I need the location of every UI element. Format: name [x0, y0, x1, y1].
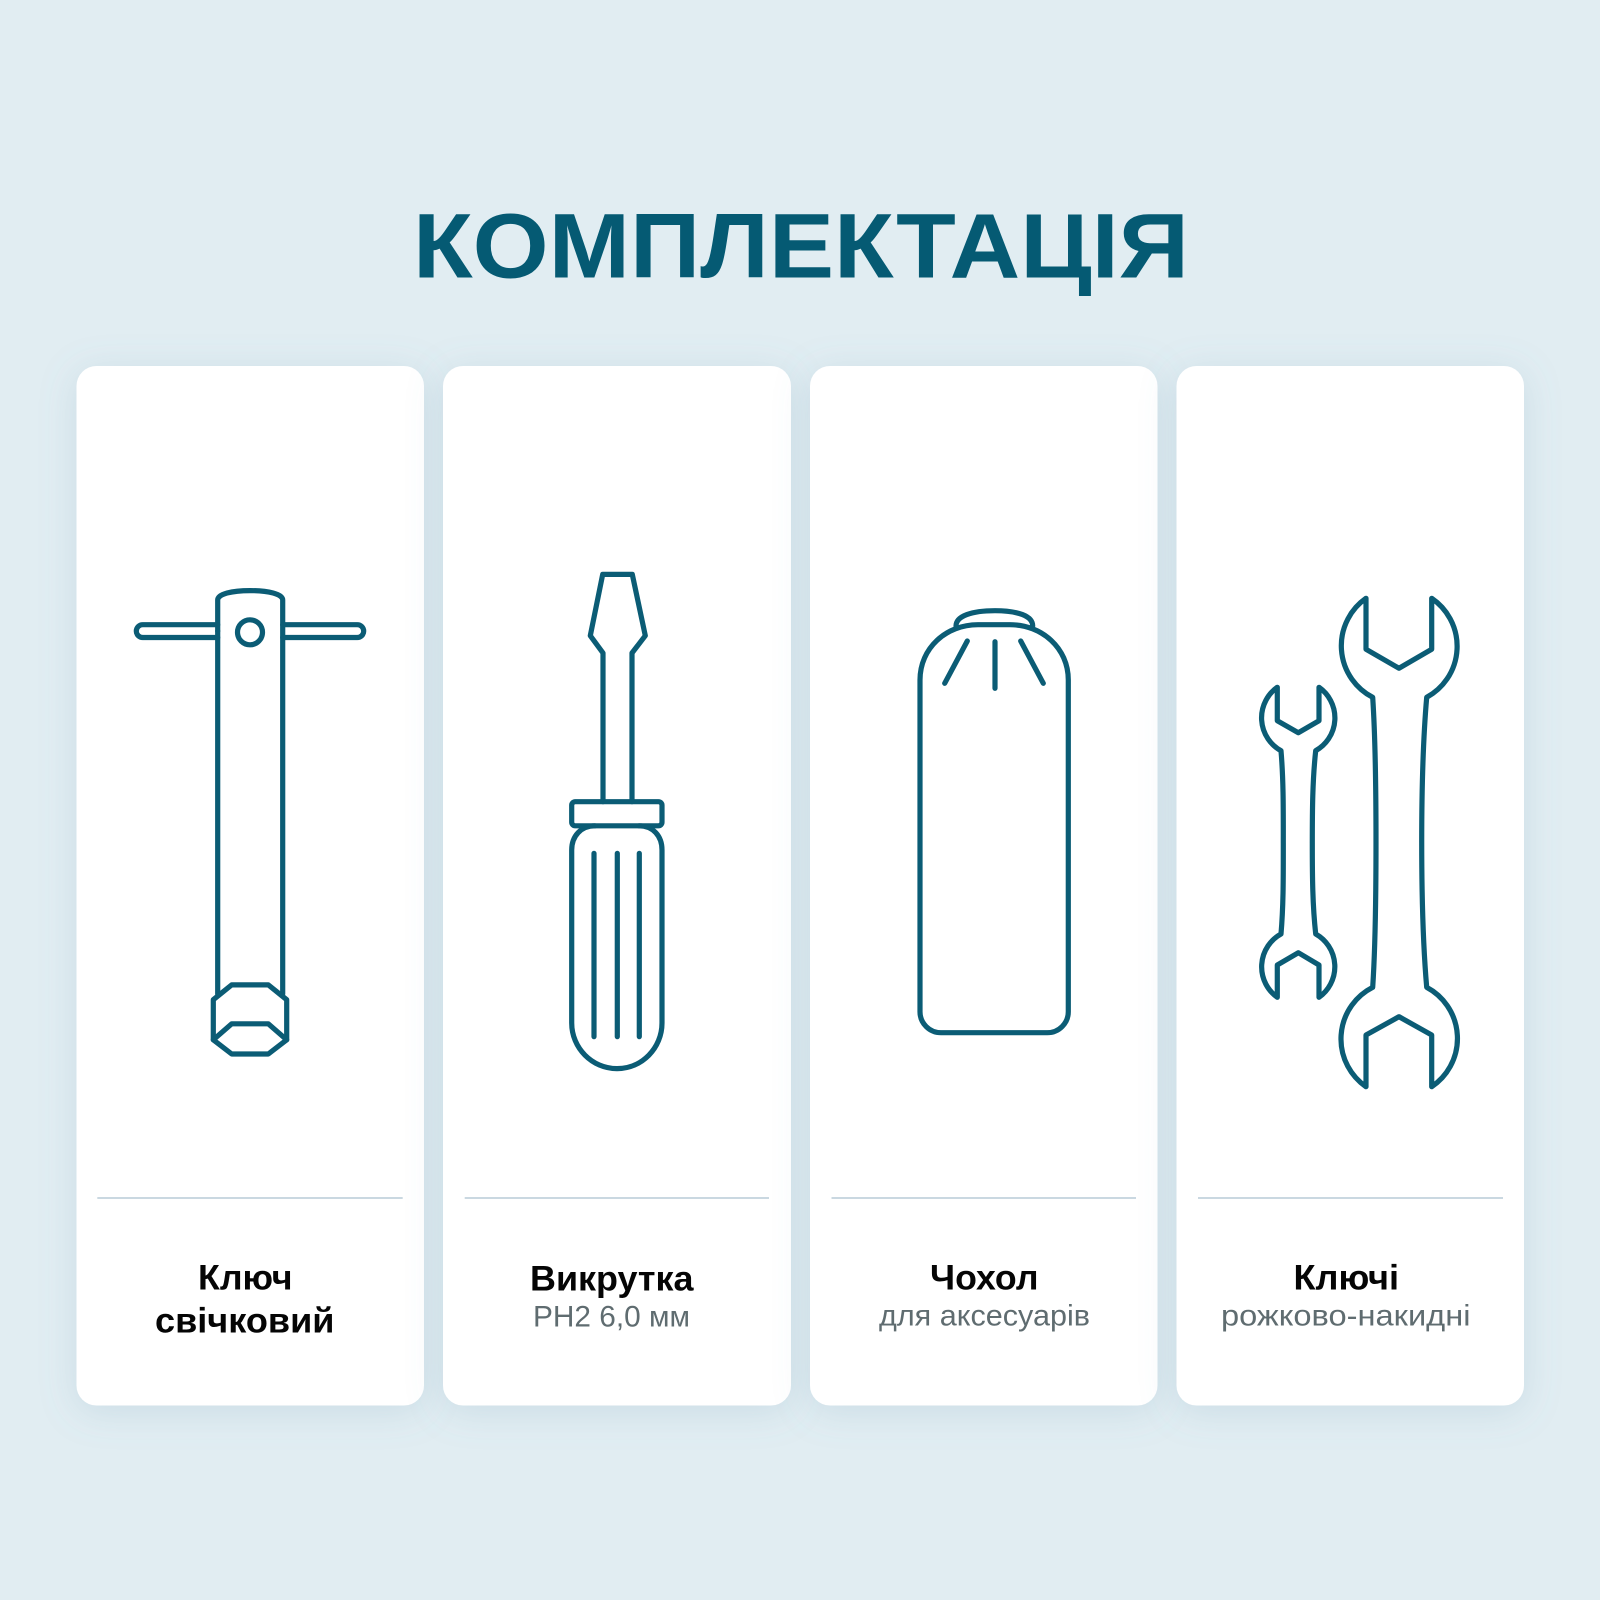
icon: large wrench [1341, 598, 1457, 1087]
panel: combination wrenches [1176, 366, 1524, 1406]
label: spark plug wrench: Ключ [198, 1257, 292, 1297]
title: КОМПЛЕКТАЦІЯ [413, 196, 1189, 298]
label: combination wrenches [1221, 1257, 1470, 1333]
label: combination wrenches: Ключі [1294, 1257, 1399, 1297]
icon: spark plug wrench [136, 591, 364, 1054]
icon: small wrench [1262, 687, 1335, 997]
label: screwdriver [530, 1259, 694, 1334]
icon: accessory case [920, 611, 1068, 1033]
label: accessory case: для аксесуарів [879, 1300, 1090, 1333]
label: screwdriver: РН2 6,0 мм [533, 1301, 690, 1334]
panel: accessory case [810, 366, 1158, 1406]
label: spark plug wrench: свічковий [155, 1301, 334, 1341]
label: accessory case [879, 1257, 1090, 1333]
panel: screwdriver [443, 366, 791, 1406]
icon: screwdriver [572, 574, 662, 1069]
panel: spark plug wrench [76, 366, 424, 1406]
label: accessory case: Чохол [930, 1257, 1038, 1297]
label: combination wrenches: рожково-накидні [1221, 1300, 1470, 1333]
label: screwdriver: Викрутка [530, 1259, 694, 1299]
label: spark plug wrench [155, 1257, 334, 1341]
icon: combination wrenches [1262, 598, 1457, 1087]
